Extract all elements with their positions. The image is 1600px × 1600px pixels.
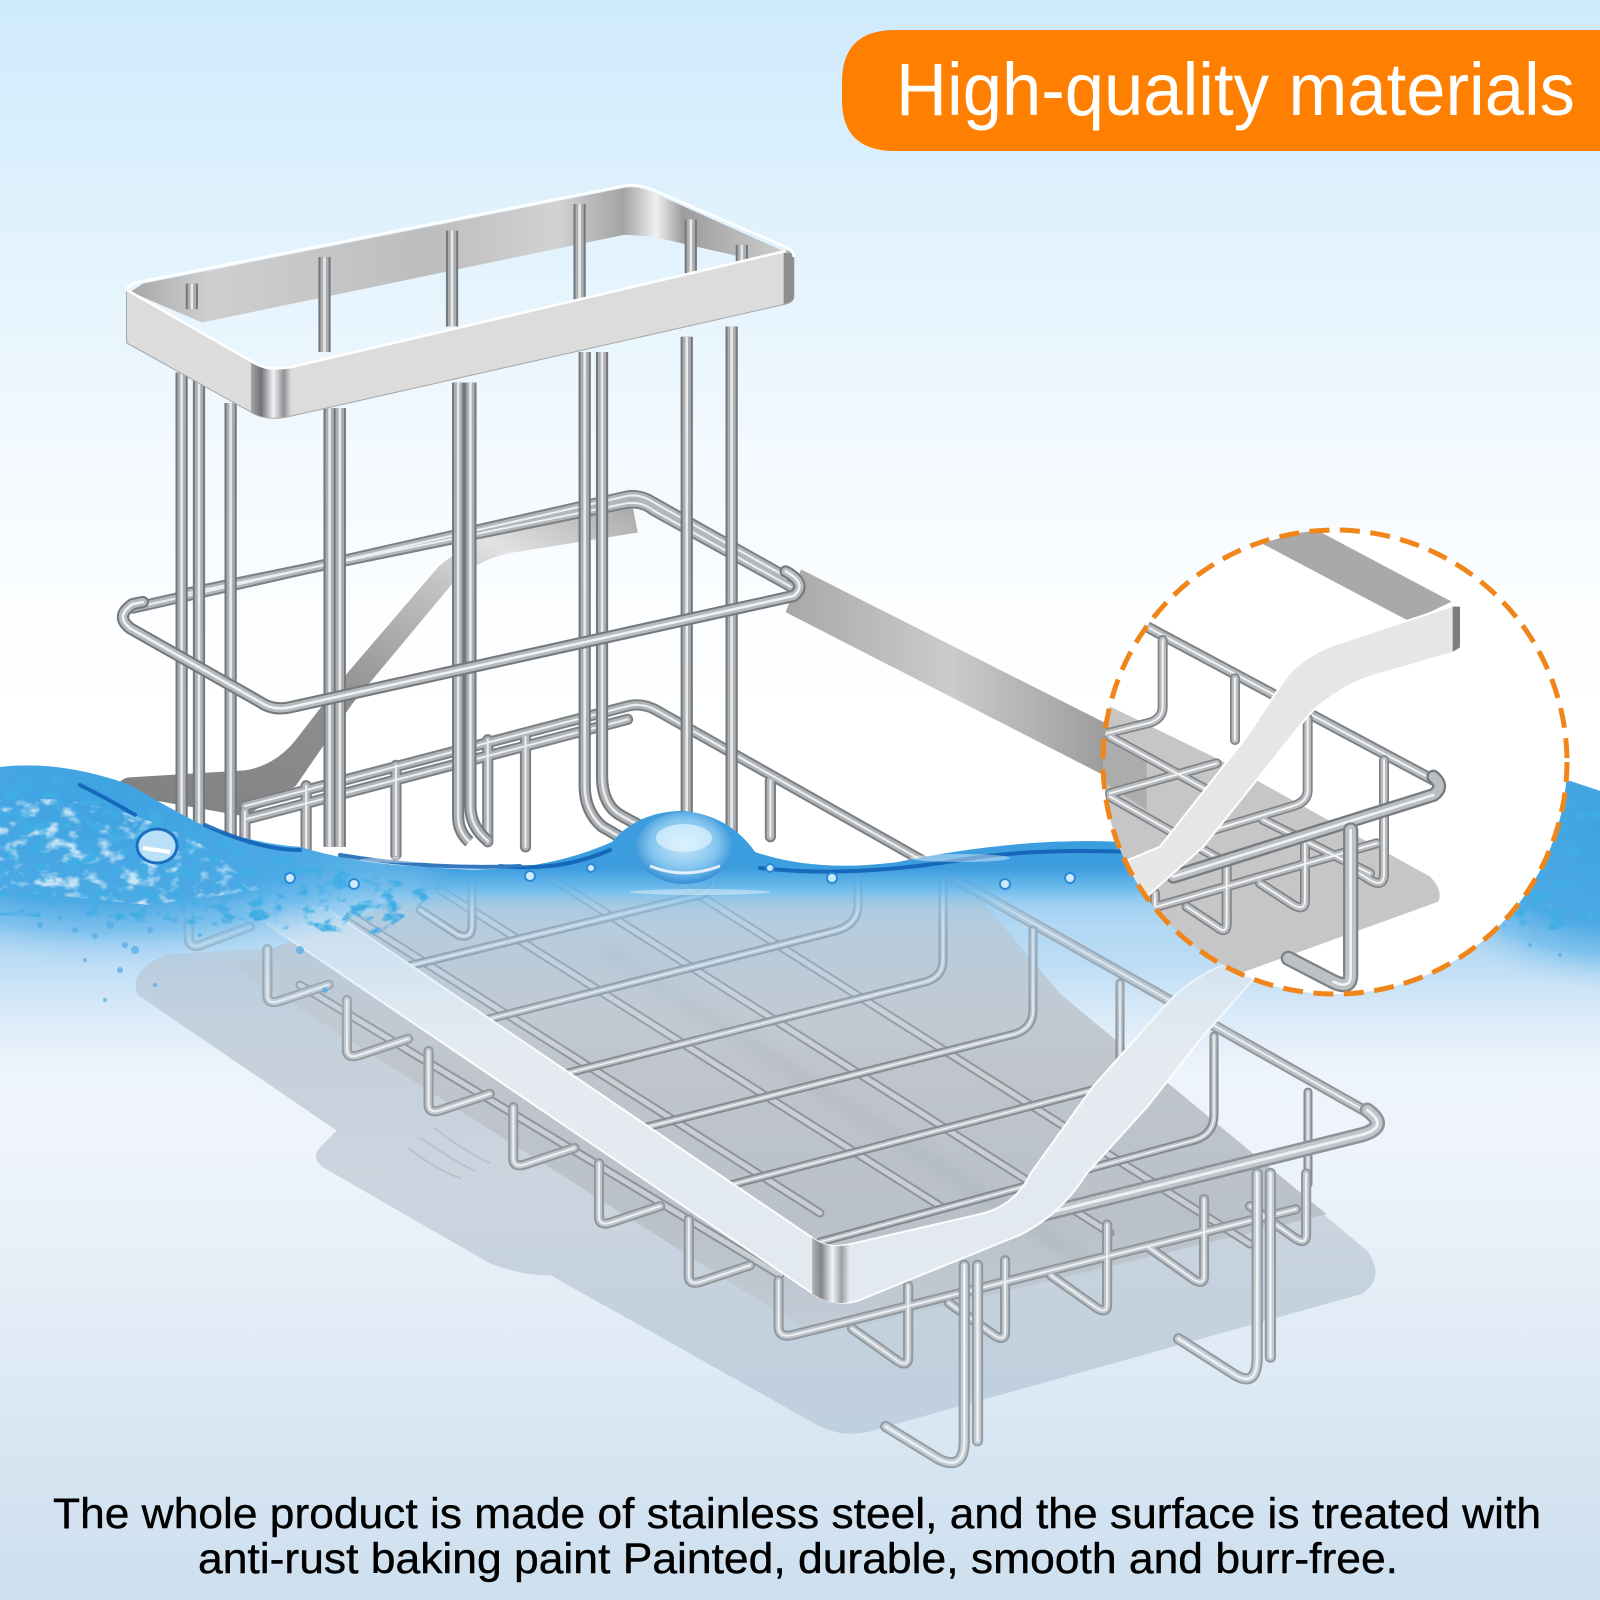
scattered bubbles bbox=[37, 902, 1592, 1002]
description text bbox=[53, 1490, 1541, 1583]
drip tray bbox=[136, 898, 1375, 1434]
top ring front faces bbox=[127, 185, 794, 418]
lens background bbox=[1103, 530, 1567, 994]
magnified S-curve strap bbox=[1120, 605, 1460, 897]
lower back rail wires bbox=[245, 705, 1367, 1112]
line 2: anti-rust baking paint Painted, durable, smooth and burr-free. bbox=[198, 1535, 1398, 1583]
middle ring front wire bbox=[123, 571, 799, 708]
dashed orange circle bbox=[1103, 530, 1567, 994]
top ring back wall bbox=[131, 187, 788, 322]
right strap bbox=[786, 569, 1112, 780]
underwater background bbox=[0, 765, 1600, 1600]
left water mass bbox=[0, 765, 500, 990]
bubble: large central bbox=[636, 812, 732, 884]
magnified wires bbox=[1107, 640, 1384, 930]
bubble: ring on left bbox=[137, 829, 177, 863]
water surface bbox=[0, 765, 1600, 1002]
support legs bbox=[886, 1173, 1270, 1463]
cross floor wires bbox=[400, 860, 1308, 1242]
magnified strap end shading bbox=[1453, 607, 1460, 652]
magnified tray bbox=[1100, 702, 1440, 973]
long floor wires bbox=[300, 864, 1250, 1275]
right water mass bbox=[1400, 781, 1600, 1000]
magnified front rail bbox=[1173, 777, 1439, 877]
right water flecks bbox=[1500, 800, 1600, 935]
magnified strap bbox=[1262, 528, 1452, 622]
basket hook wires bbox=[189, 898, 1306, 1364]
dark wave crest line bbox=[80, 785, 1130, 872]
surface highlights bbox=[360, 854, 1010, 895]
heading badge bbox=[842, 30, 1600, 151]
line 1: The whole product is made of stainless steel, and the surface is treated with bbox=[53, 1490, 1541, 1538]
front rail bbox=[1010, 1110, 1377, 1222]
orange tab bbox=[842, 30, 1600, 151]
middle ring back wire bbox=[133, 496, 791, 608]
left water highlights bbox=[0, 798, 260, 905]
magnified rack detail bbox=[1080, 528, 1460, 985]
diagonal strap bbox=[117, 506, 638, 816]
wide strap with S-curve bbox=[235, 902, 1276, 1303]
magnified back rail bbox=[1147, 627, 1433, 780]
small droplets bbox=[285, 864, 1075, 889]
floor grid wires bbox=[300, 860, 1308, 1275]
magnified strap stub bbox=[1103, 738, 1146, 810]
heading text: High-quality materials bbox=[896, 48, 1575, 131]
detail lens bbox=[1080, 528, 1567, 994]
product: rack and tray bbox=[117, 185, 1377, 1463]
underwater wash bbox=[0, 765, 1600, 1600]
left water dark flecks bbox=[0, 774, 440, 935]
vertical rods bbox=[182, 204, 742, 862]
magnified leg bbox=[1288, 830, 1351, 985]
central water band bbox=[0, 765, 1600, 930]
